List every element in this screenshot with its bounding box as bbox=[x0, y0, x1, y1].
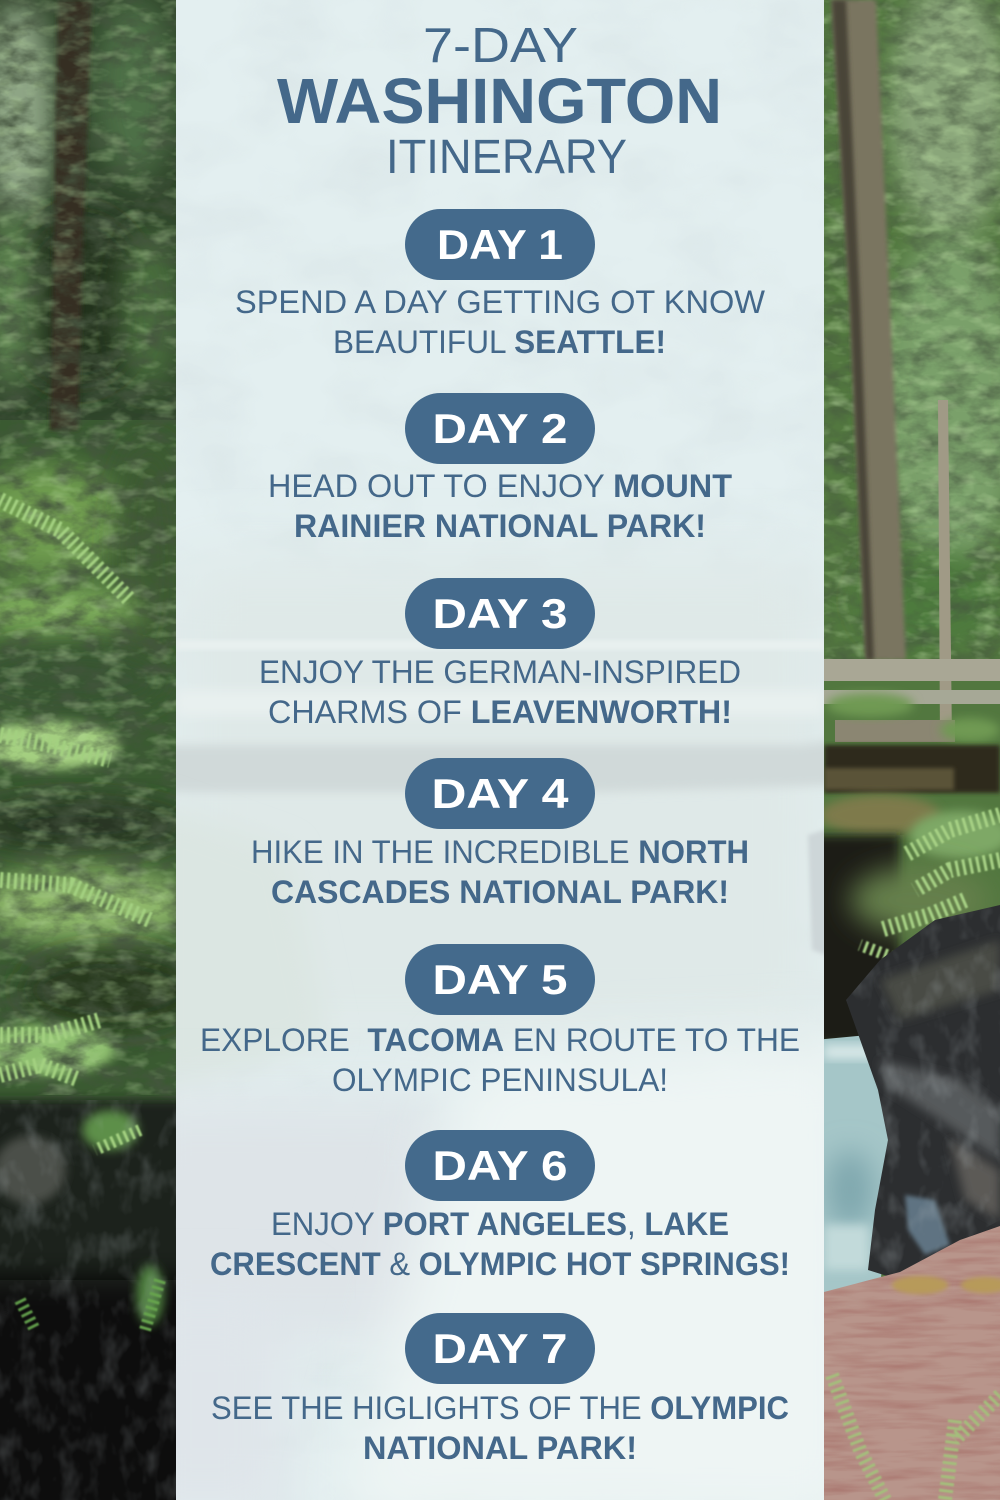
description: day 6 bbox=[210, 1206, 790, 1282]
badge: day 4 bbox=[405, 758, 595, 829]
description: day 2: HEAD OUT TO ENJOY MOUNT bbox=[268, 468, 732, 504]
description: day 4: HIKE IN THE INCREDIBLE NORTH bbox=[251, 834, 749, 870]
title line: Washington: WASHINGTON bbox=[277, 65, 722, 137]
fern fronds bbox=[860, 815, 1000, 960]
title line: 7-day: 7-DAY bbox=[423, 19, 578, 73]
badge: day 6 bbox=[405, 1130, 595, 1201]
description: day 2: RAINIER NATIONAL PARK! bbox=[294, 508, 706, 544]
description: day 5: EXPLORE TACOMA EN ROUTE TO THE bbox=[200, 1022, 800, 1058]
badge: day 1: DAY 1 bbox=[437, 221, 563, 268]
red cedar log bbox=[824, 1226, 1000, 1500]
description: day 1: SPEND A DAY GETTING OT KNOW bbox=[235, 284, 766, 320]
photo: left forest strip bbox=[0, 0, 176, 1500]
day 3 bbox=[259, 578, 741, 730]
fern fronds bbox=[0, 500, 160, 1330]
mossy bank bbox=[820, 795, 940, 835]
description: day 1 bbox=[235, 284, 766, 360]
day 2 bbox=[268, 393, 732, 544]
trunk bbox=[50, 0, 92, 430]
description: day 7: NATIONAL PARK! bbox=[363, 1430, 637, 1466]
day 1 bbox=[235, 209, 766, 360]
badge: day 6: DAY 6 bbox=[432, 1142, 568, 1189]
title bbox=[277, 19, 722, 184]
badge: day 1 bbox=[405, 209, 595, 280]
rock bbox=[846, 905, 1000, 1276]
badge: day 7: DAY 7 bbox=[432, 1325, 568, 1372]
badge: day 3 bbox=[405, 578, 595, 649]
bridge bbox=[824, 659, 1000, 681]
panel: translucent itinerary column bbox=[176, 0, 824, 1500]
description: day 6: ENJOY PORT ANGELES, LAKE bbox=[271, 1206, 729, 1242]
photo: right forest strip bbox=[824, 0, 1000, 1500]
badge: day 2 bbox=[405, 393, 595, 464]
description: day 7: SEE THE HIGLIGHTS OF THE OLYMPIC bbox=[211, 1390, 789, 1426]
badge: day 5: DAY 5 bbox=[432, 956, 568, 1003]
description: day 2 bbox=[268, 468, 732, 544]
description: day 5 bbox=[200, 1022, 800, 1098]
day 5 bbox=[200, 944, 800, 1098]
description: day 3 bbox=[259, 654, 741, 730]
badge: day 3: DAY 3 bbox=[432, 590, 568, 637]
badge: day 5 bbox=[405, 944, 595, 1015]
description: day 3: ENJOY THE GERMAN-INSPIRED bbox=[259, 654, 741, 690]
river bbox=[824, 1036, 888, 1292]
day 6 bbox=[210, 1130, 790, 1282]
tree trunk bbox=[832, 0, 906, 660]
description: day 6: CRESCENT & OLYMPIC HOT SPRINGS! bbox=[210, 1246, 790, 1282]
description: day 1: BEAUTIFUL SEATTLE! bbox=[333, 324, 666, 360]
description: day 4 bbox=[251, 834, 749, 910]
badge: day 2: DAY 2 bbox=[432, 405, 568, 452]
fern fronds on log bbox=[832, 1375, 1000, 1500]
badge: day 4: DAY 4 bbox=[432, 770, 569, 817]
description: day 3: CHARMS OF LEAVENWORTH! bbox=[268, 694, 732, 730]
ghost gorge bbox=[176, 827, 293, 1080]
day 4 bbox=[251, 758, 749, 910]
ghost bridge bbox=[184, 644, 799, 646]
badge: day 7 bbox=[405, 1313, 595, 1384]
title line: itinerary: ITINERARY bbox=[386, 131, 627, 184]
description: day 4: CASCADES NATIONAL PARK! bbox=[271, 874, 729, 910]
description: day 5: OLYMPIC PENINSULA! bbox=[332, 1062, 668, 1098]
description: day 7 bbox=[211, 1390, 789, 1466]
day 7 bbox=[211, 1313, 789, 1466]
